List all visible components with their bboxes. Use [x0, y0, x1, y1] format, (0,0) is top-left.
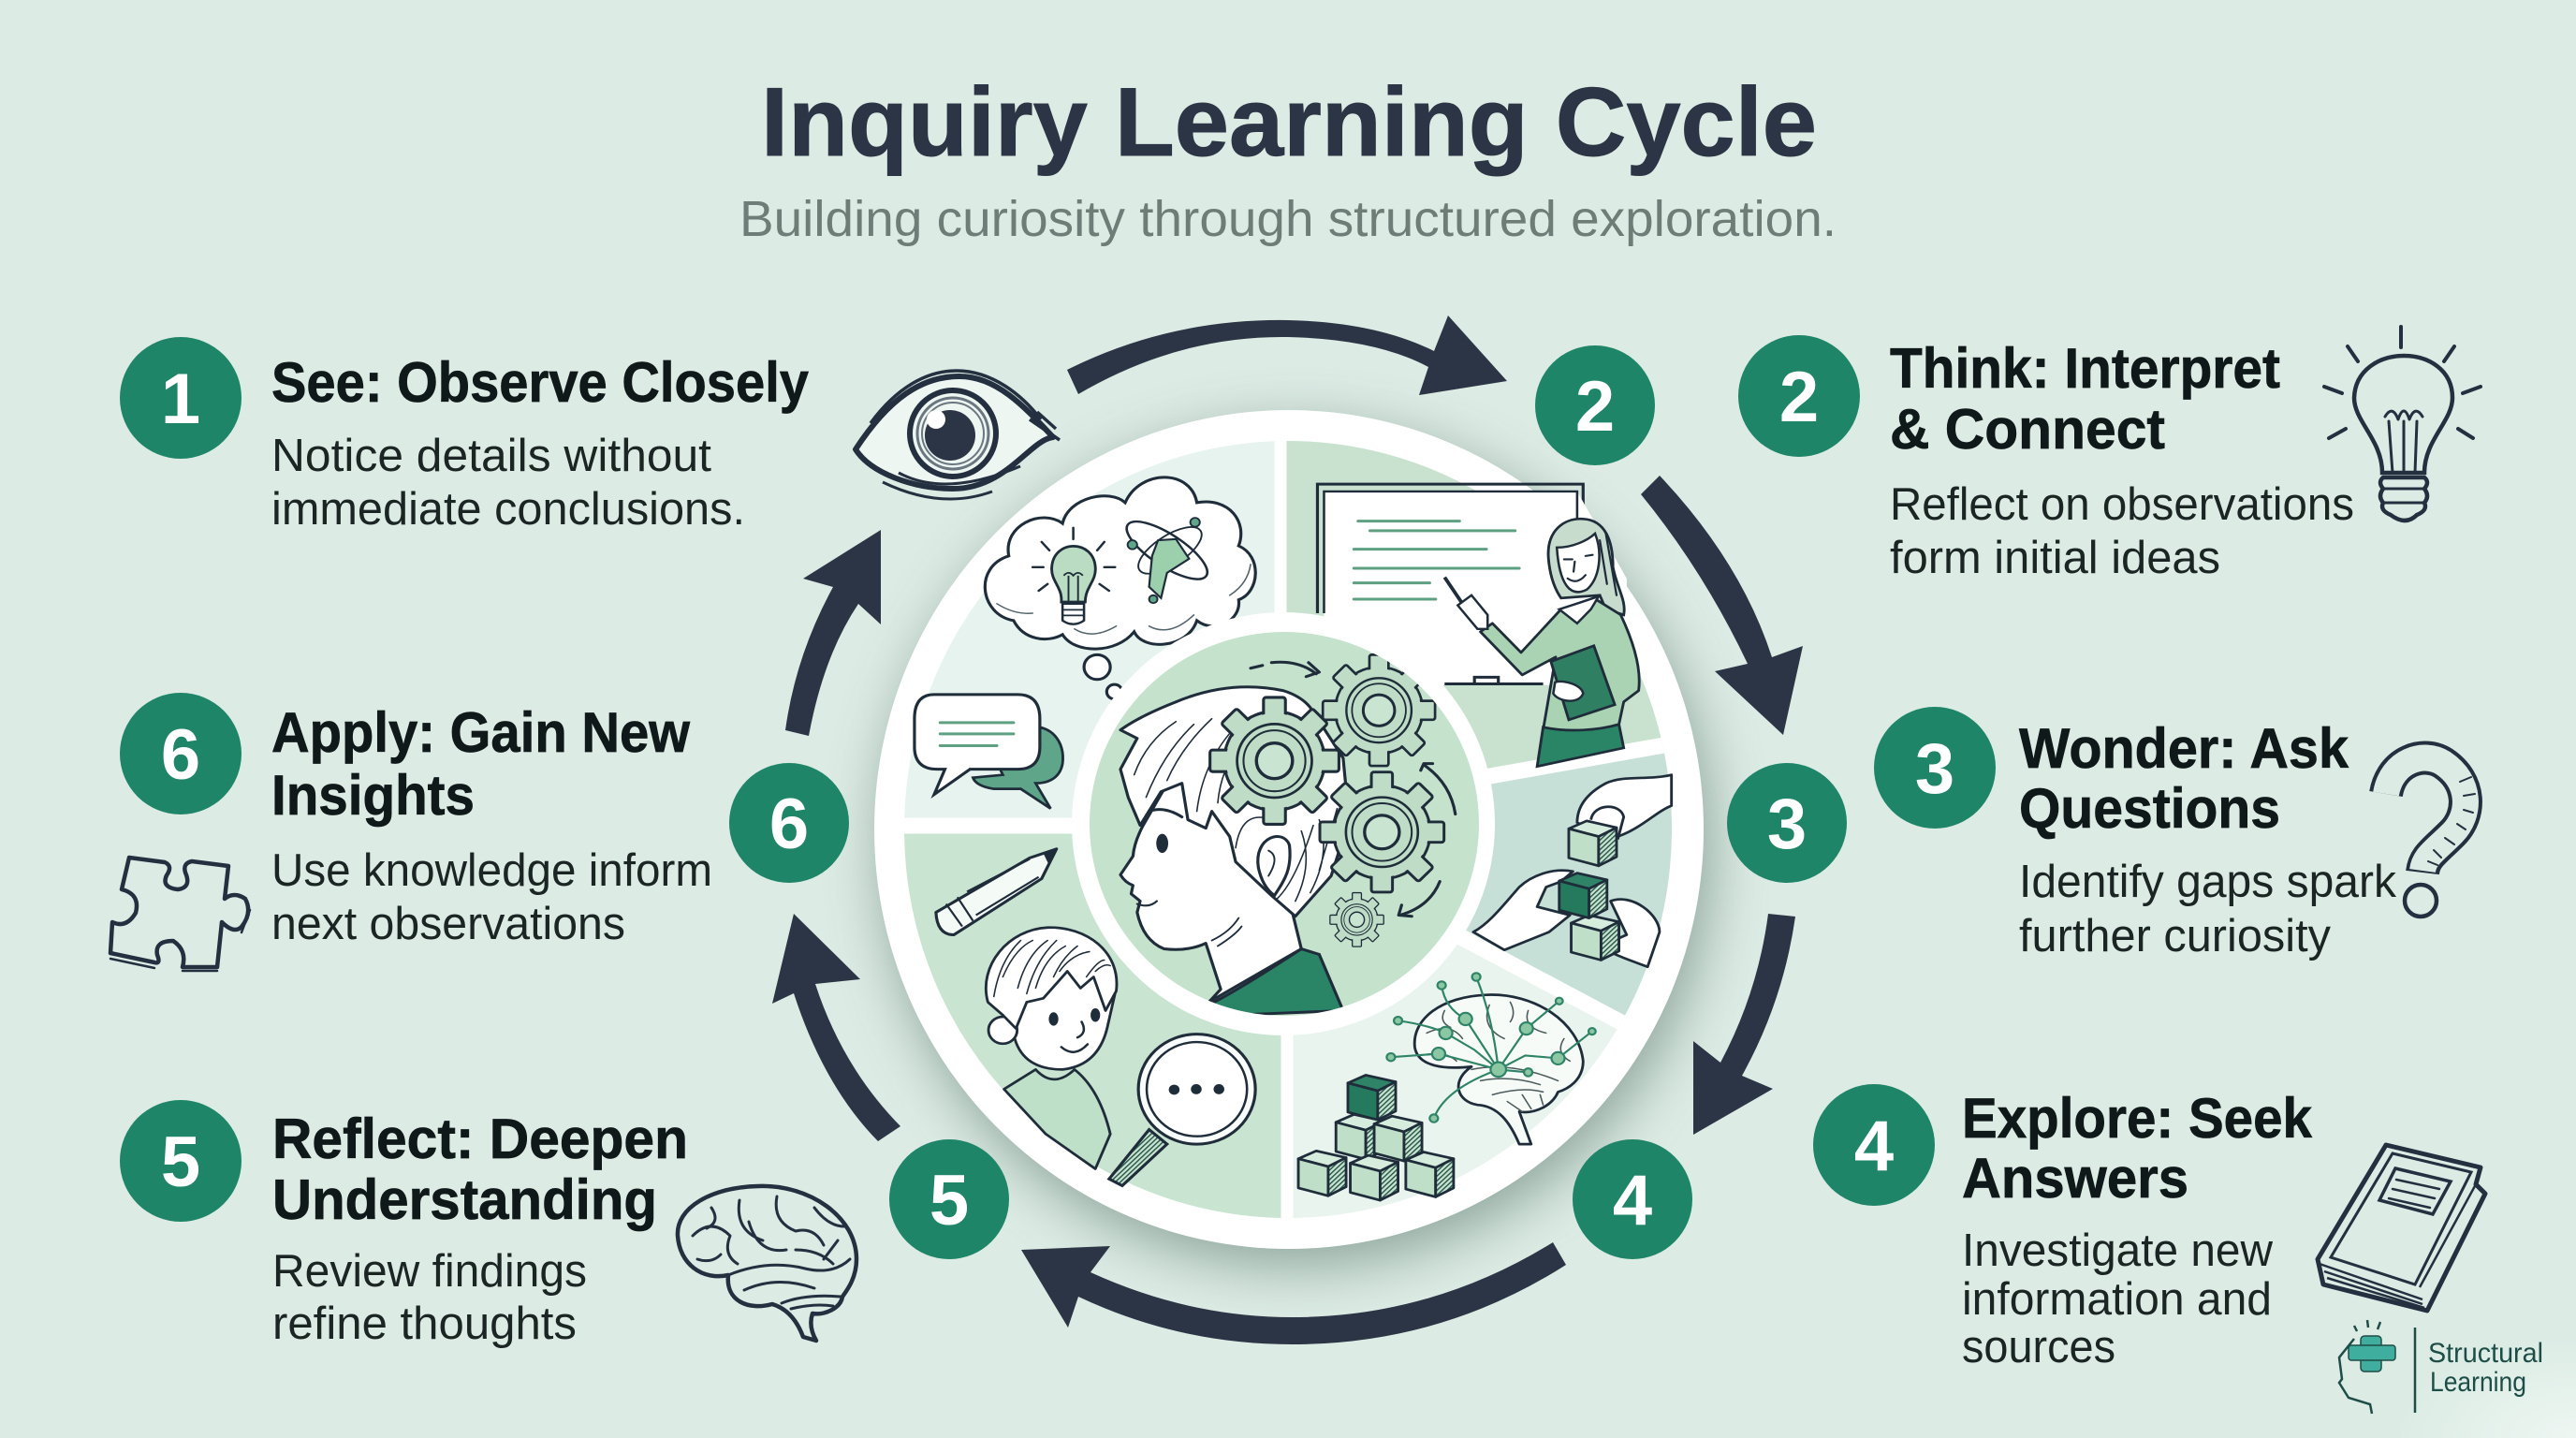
step 3: wonder: further curiosity [2019, 911, 2331, 961]
step 4: explore: information and [1962, 1274, 2272, 1325]
step 4: explore: 4 [1854, 1107, 1894, 1186]
step 6: apply: next observations [271, 899, 625, 949]
icon: lightbulb [2324, 327, 2481, 521]
cycle badge 6 [729, 763, 849, 883]
subtitle: Building curiosity through structured exploration. [739, 191, 1837, 247]
step 4: explore: Explore: Seek [1962, 1087, 2313, 1150]
panel: speech bubbles [915, 695, 1063, 809]
step 2: think: & Connect [1890, 398, 2165, 461]
title: Inquiry Learning Cycle [761, 68, 1817, 177]
icon: book [2318, 1145, 2485, 1311]
panel: child profile with gears [1072, 612, 1495, 1035]
cycle badge 4 [1573, 1139, 1692, 1259]
step 1: see: immediate conclusions. [271, 484, 745, 535]
logo: Structural Learning: Learning [2430, 1367, 2526, 1398]
cycle badge 2 [1535, 345, 1655, 465]
cycle badge 3 [1727, 763, 1847, 883]
cycle badge 3: 3 [1767, 785, 1807, 864]
arrow: think to wonder [1641, 476, 1803, 735]
step 5: reflect: refine thoughts [272, 1299, 577, 1349]
step 4: explore: sources [1962, 1322, 2115, 1372]
logo: Structural Learning [2339, 1320, 2543, 1414]
cycle badge 5: 5 [929, 1161, 969, 1240]
step 4: explore: Answers [1962, 1147, 2188, 1210]
icon: question mark [2386, 758, 2475, 917]
step 4: explore: Investigate new [1962, 1225, 2274, 1276]
step 5: reflect: Review findings [272, 1246, 587, 1297]
cycle badge 4: 4 [1613, 1161, 1652, 1240]
step 1: see: Notice details without [271, 431, 711, 481]
central illustrated disc [874, 410, 1711, 1267]
step 2: think: Reflect on observations [1890, 479, 2354, 530]
cycle badge 2: 2 [1575, 367, 1615, 447]
arrow: wonder to explore [1693, 914, 1795, 1135]
arrow: reflect to apply [772, 914, 900, 1141]
step 1: see: See: Observe Closely [271, 351, 810, 414]
panel: brain network and blocks [1298, 973, 1596, 1200]
step 4: explore [1813, 1084, 2313, 1372]
icon: eye [856, 371, 1060, 499]
step 6: apply: 6 [161, 715, 200, 795]
step 3: wonder: Wonder: Ask [2019, 717, 2349, 780]
cycle badge 6: 6 [769, 785, 809, 864]
step 2: think: Think: Interpret [1890, 337, 2280, 400]
step 1: see: 1 [161, 360, 200, 439]
step 5: reflect: Reflect: Deepen [272, 1108, 688, 1170]
step 6: apply: Use knowledge inform [271, 845, 712, 896]
panel: teacher at whiteboard [1317, 484, 1639, 767]
logo: Structural Learning: Structural [2428, 1338, 2543, 1369]
icon: brain [678, 1186, 856, 1341]
panel: hands building blocks [1473, 775, 1672, 967]
arrow: see to think [1067, 315, 1507, 395]
step 5: reflect: Understanding [272, 1168, 657, 1231]
step 3: wonder: Questions [2019, 777, 2280, 840]
panel: thought cloud with bulb and globe [985, 477, 1255, 699]
step 2: think [1738, 335, 2354, 583]
step 1: see [120, 337, 810, 535]
step 6: apply: Apply: Gain New [271, 701, 690, 764]
step 5: reflect [120, 1100, 688, 1349]
step 3: wonder [1874, 707, 2396, 961]
arrow: explore to reflect [1021, 1242, 1566, 1344]
step 3: wonder: 3 [1915, 729, 1954, 809]
panel: child with magnifying glass and pencil [936, 849, 1255, 1185]
step 6: apply [120, 693, 712, 949]
step 6: apply: Insights [271, 764, 475, 827]
step 2: think: form initial ideas [1890, 533, 2220, 583]
step 5: reflect: 5 [161, 1123, 200, 1202]
cycle badge 5 [889, 1139, 1009, 1259]
step 3: wonder: Identify gaps spark [2019, 857, 2396, 907]
arrow: apply to see [785, 530, 881, 736]
step 2: think: 2 [1779, 358, 1819, 437]
icon: puzzle piece [110, 858, 250, 971]
